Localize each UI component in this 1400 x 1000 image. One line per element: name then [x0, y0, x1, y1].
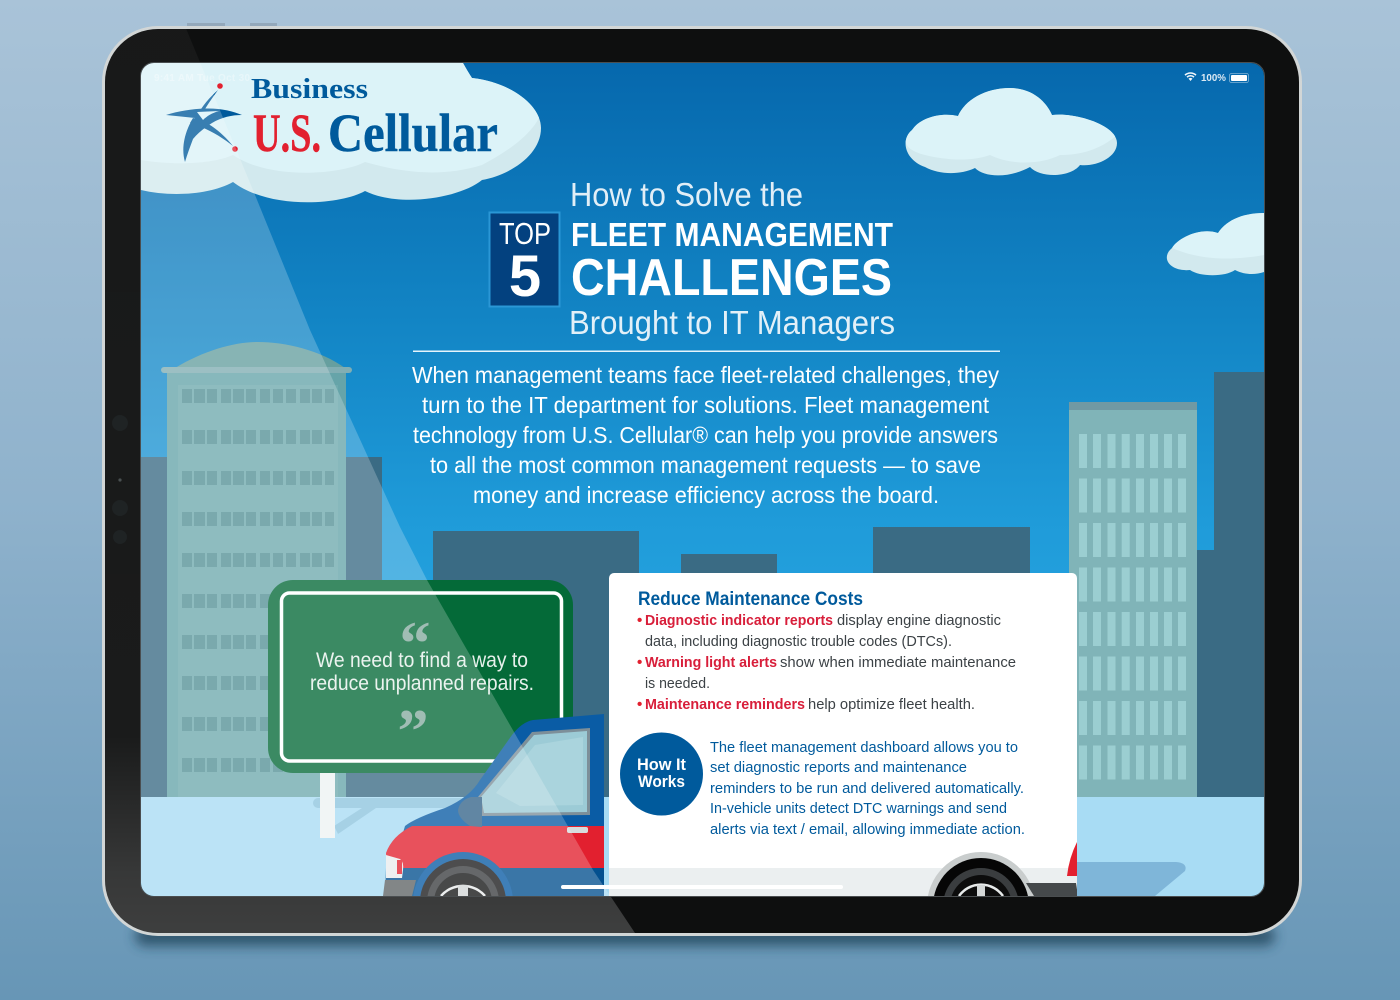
- how it works text: alerts via text / email, allowing immediate action.: [710, 821, 1025, 838]
- cloud small right: [1166, 213, 1264, 276]
- logo cloud: [141, 63, 551, 213]
- tablet frame: [102, 26, 1302, 936]
- bullet list: Warning light alerts: [645, 654, 777, 671]
- intro paragraph: [412, 362, 999, 508]
- tower window bands: [182, 389, 334, 772]
- intro paragraph: turn to the IT department for solutions. Fleet management: [422, 392, 990, 418]
- rear wheel: [927, 852, 1035, 960]
- intro paragraph: to all the most common management requests — to save: [430, 452, 981, 478]
- bullet list: show when immediate maintenance: [780, 654, 1016, 671]
- mirror: [458, 797, 482, 827]
- window: [478, 728, 590, 816]
- red stripe: [386, 826, 604, 868]
- truck ground shadow: [1077, 862, 1186, 896]
- sign post: [320, 772, 335, 838]
- cab body: [404, 714, 604, 831]
- road sign: [268, 580, 573, 773]
- wheel arch: [414, 852, 512, 896]
- status bar: [154, 72, 1248, 84]
- left domed tower: [161, 342, 352, 797]
- camera and sensors: [112, 415, 128, 544]
- bezel glare: [102, 26, 637, 936]
- bullet list: •: [637, 612, 642, 629]
- intro paragraph: money and increase efficiency across the board.: [473, 482, 939, 508]
- top 5 badge: 5: [509, 244, 541, 309]
- bullet list: Maintenance reminders: [645, 696, 805, 713]
- white info card: [609, 573, 1078, 960]
- ground: [141, 797, 1264, 896]
- bullet list: display engine diagnostic: [837, 612, 1001, 629]
- top 5 badge: TOP: [499, 216, 551, 251]
- how it works text: [710, 739, 1025, 838]
- tablet screen: [141, 63, 1264, 896]
- home indicator: [561, 885, 843, 889]
- how it works text: set diagnostic reports and maintenance: [710, 759, 967, 776]
- logo: Cellular: [328, 103, 498, 163]
- logo: [166, 73, 498, 163]
- bullet list: •: [637, 654, 642, 671]
- how it works text: The fleet management dashboard allows you to: [710, 739, 1018, 756]
- closing quote mark: ”: [398, 698, 428, 766]
- intro paragraph: When management teams face fleet-related challenges, they: [412, 362, 999, 388]
- status bar: 100%: [1201, 73, 1226, 84]
- bumper: [383, 880, 416, 896]
- bullet list: data, including diagnostic trouble codes (DTCs).: [645, 633, 952, 650]
- title: FLEET MANAGEMENT: [571, 216, 893, 253]
- truck box lower band: [609, 868, 1077, 896]
- truck tail light: [1067, 842, 1077, 876]
- lower stripe: [385, 868, 604, 896]
- truck cab: [383, 714, 604, 896]
- quote text: We need to find a way to: [316, 649, 528, 672]
- how it works badge: How It: [637, 756, 686, 774]
- quote text: [310, 649, 534, 695]
- how it works badge: [620, 732, 703, 816]
- top 5 badge: [490, 212, 560, 309]
- logo: U.S.: [253, 103, 321, 163]
- screen edge: [140, 62, 1264, 896]
- screen glare: [102, 26, 637, 936]
- logo wordmark: Business: [251, 73, 368, 105]
- wifi icon: [1184, 72, 1196, 81]
- bullet list: is needed.: [645, 675, 710, 692]
- title: CHALLENGES: [571, 249, 892, 307]
- right tower: [1069, 402, 1197, 797]
- intro paragraph: technology from U.S. Cellular® can help you provide answers: [413, 422, 998, 448]
- how it works badge: Works: [638, 773, 685, 791]
- status bar: 9:41 AM Tue Oct 30: [154, 73, 250, 84]
- rear bumper: [1026, 883, 1078, 896]
- tablet top buttons: [187, 23, 277, 26]
- background dark buildings: [141, 372, 1264, 797]
- door handle: [567, 827, 588, 833]
- logo star icon: [166, 90, 242, 162]
- title rule: [413, 350, 1000, 352]
- title: Brought to IT Managers: [569, 304, 895, 341]
- wheel hub: [441, 886, 485, 896]
- sign post shadow: [313, 798, 470, 834]
- card heading: Reduce Maintenance Costs: [638, 589, 863, 610]
- headlight: [386, 855, 403, 878]
- how it works text: reminders to be run and delivered automatically.: [710, 780, 1024, 797]
- how it works text: In-vehicle units detect DTC warnings and send: [710, 800, 1007, 817]
- cloud upper right: [906, 88, 1117, 176]
- right tower windows: [1079, 434, 1186, 780]
- title: [569, 176, 895, 341]
- bullet list: Diagnostic indicator reports: [645, 612, 833, 629]
- opening quote mark: “: [400, 610, 430, 678]
- title: How to Solve the: [570, 176, 803, 213]
- bullet list: •: [637, 696, 642, 713]
- sky: [141, 63, 1264, 896]
- bullet list: [637, 612, 1016, 713]
- battery icon: [1231, 75, 1247, 81]
- quote text: reduce unplanned repairs.: [310, 672, 534, 695]
- tablet shadow: [135, 926, 1275, 946]
- bullet list: help optimize fleet health.: [808, 696, 975, 713]
